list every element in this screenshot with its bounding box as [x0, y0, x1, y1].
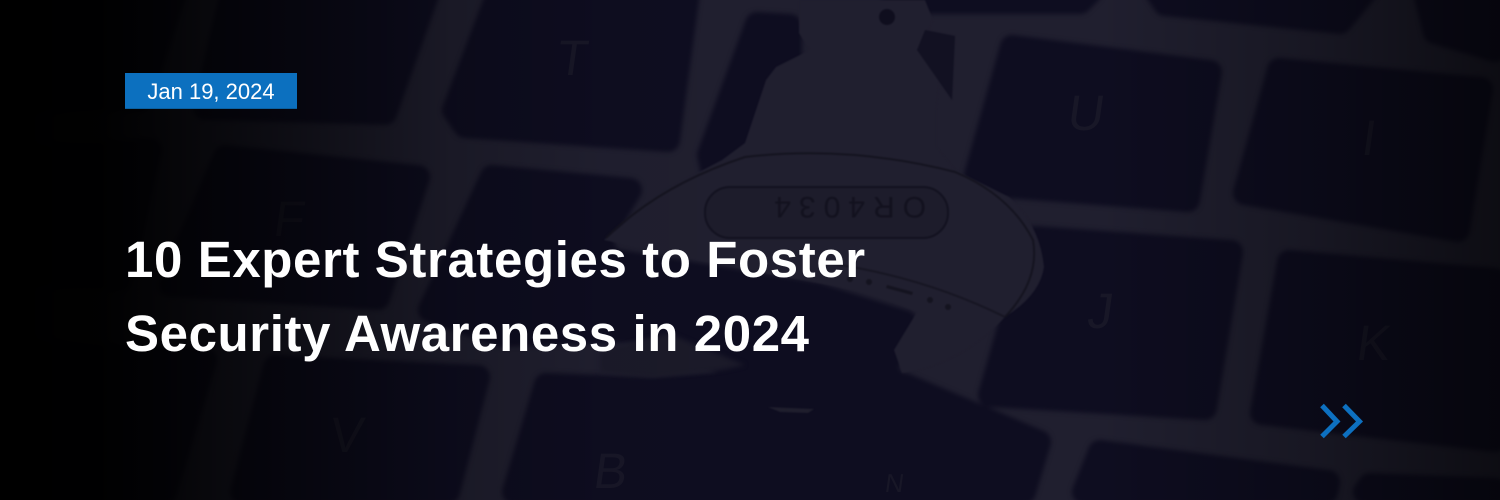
icon: double chevron arrow	[1320, 404, 1363, 438]
key: head and shank: OR4034	[766, 190, 926, 223]
light reflected strip under the key	[600, 333, 745, 377]
faint key letters	[270, 30, 1395, 499]
hole of the key bow	[610, 260, 905, 395]
date badge	[125, 73, 297, 109]
faint key letters: N	[883, 468, 906, 498]
faint key letters: I	[1358, 110, 1380, 166]
title	[125, 231, 866, 362]
faint key letters: V	[326, 407, 368, 463]
date badge: Jan 19, 2024	[147, 79, 275, 104]
faint key letters: U	[1064, 85, 1108, 141]
faint key letters: F	[270, 191, 309, 247]
title: Security Awareness in 2024	[125, 305, 810, 362]
key: head and shank	[604, 0, 1044, 373]
faint key letters: K	[1353, 315, 1395, 371]
faint key letters: T	[553, 30, 592, 86]
faint key letters: B	[590, 443, 632, 499]
faint key letters: J	[1084, 283, 1117, 339]
title: 10 Expert Strategies to Foster	[125, 231, 866, 288]
